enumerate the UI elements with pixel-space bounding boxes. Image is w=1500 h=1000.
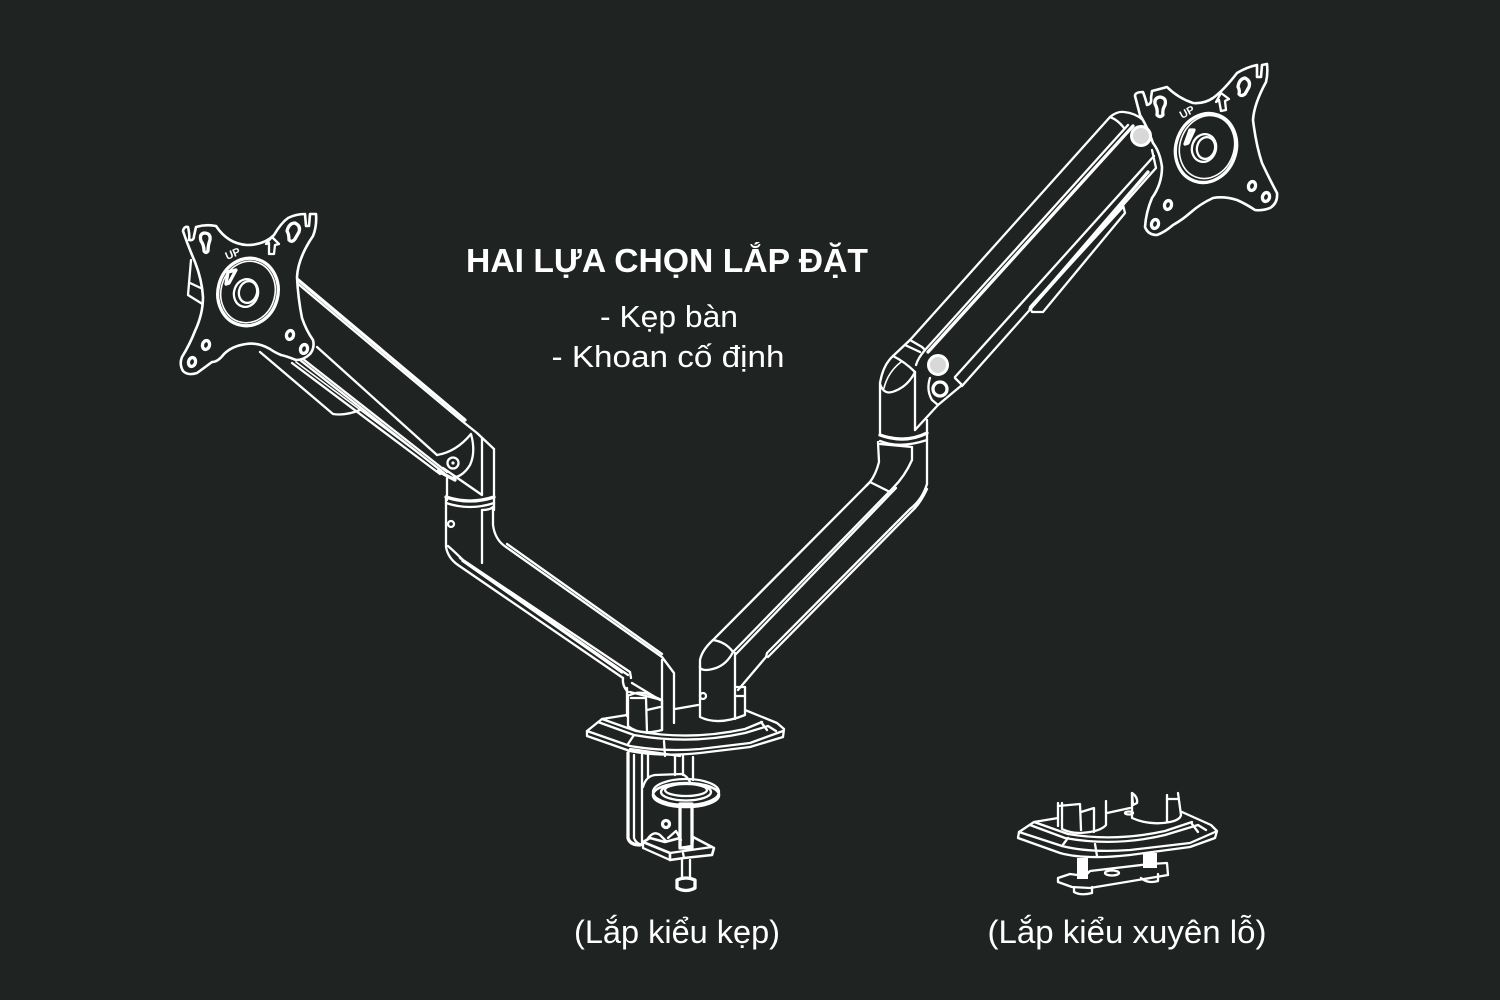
left arm joint	[438, 438, 494, 510]
desk base plate	[587, 705, 784, 756]
left monitor arm	[181, 214, 674, 730]
up label and arrow	[224, 237, 279, 263]
upper left arm	[260, 279, 494, 478]
right monitor arm	[700, 64, 1277, 721]
caption: through-hole: (Lắp kiểu xuyên lỗ)	[988, 914, 1266, 950]
right plate hub	[1166, 105, 1246, 191]
caption: clamp: (Lắp kiểu kẹp)	[574, 914, 780, 950]
right arm pivots	[928, 126, 1150, 405]
through-hole tubes	[1058, 793, 1181, 833]
right up label and arrow: UP	[1178, 104, 1197, 122]
clamp left post	[627, 688, 693, 845]
right elbow and column	[880, 340, 938, 484]
right monitor plate	[1135, 64, 1277, 235]
option: table clamp: - Kẹp bàn	[600, 299, 738, 334]
through-hole base plate	[1018, 808, 1217, 857]
option list	[552, 299, 784, 374]
clamp mount	[587, 688, 784, 890]
clamp disc	[653, 779, 719, 807]
right plate holes	[1150, 78, 1271, 229]
left column and lower arm	[446, 497, 674, 730]
option: fixed drilling: - Khoan cố định	[552, 339, 784, 374]
plate hub circles	[210, 251, 286, 333]
clamp screw and lower plate	[643, 804, 714, 890]
through-hole mount	[1018, 793, 1217, 894]
title: HAI LỰA CHỌN LẮP ĐẶT	[466, 242, 868, 279]
through-hole lower plate	[1058, 853, 1168, 894]
up label and arrow: UP	[224, 246, 242, 263]
right up label and arrow	[1178, 93, 1229, 122]
upper right arm	[910, 112, 1162, 386]
plate keyhole holes	[187, 223, 309, 367]
left monitor plate	[181, 214, 316, 374]
right lower arm	[700, 442, 927, 721]
